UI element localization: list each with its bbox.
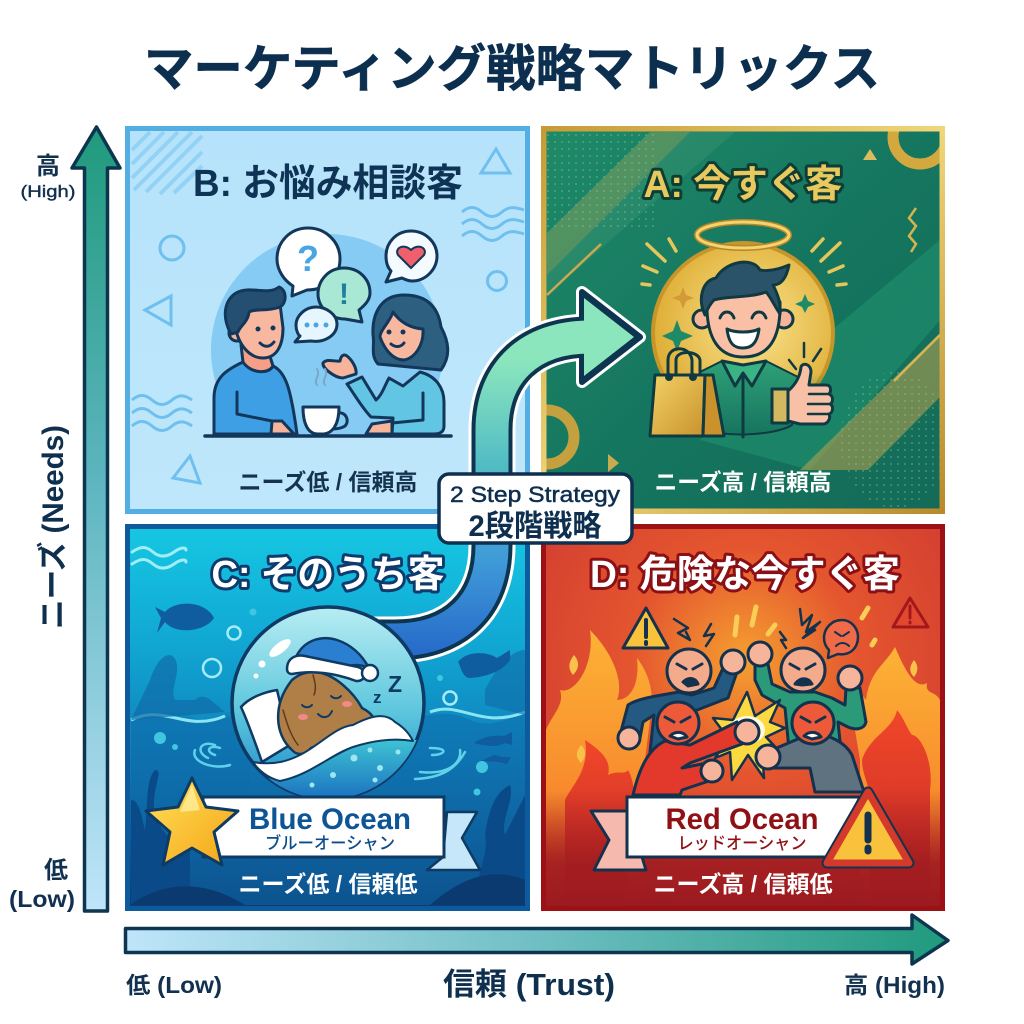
lower shading [546,796,940,906]
speech bubble: exclamation: ! [339,278,349,311]
soft backdrop circle [211,234,441,434]
strategy badge [439,474,632,543]
panel A border [544,128,942,512]
bubble contents [235,690,430,800]
blue ocean ribbon [146,778,480,870]
halo [697,222,789,248]
panel A: ready-now customers [520,110,950,514]
flames [546,630,940,856]
woman [323,295,448,434]
panel D background [541,524,945,911]
illustration: customers fighting [618,598,928,795]
panel D axis note: ニーズ高 / 信頼低 [654,871,832,897]
growth arrow from C to A [350,292,640,640]
axis label: high needs: (High) [20,182,76,201]
impact glow [729,716,765,744]
illustration: happy customer with halo [642,222,846,437]
thumbs-up hand [772,343,833,424]
nightcap [287,638,378,681]
snore letters: Z [388,671,402,697]
panel A axis note: ニーズ高 / 信頼高 [654,469,832,495]
radiating sparkle lines [642,239,846,285]
seaweed and coral [130,770,526,905]
red ocean ribbon [591,792,909,870]
strategy badge: 2段階戦略 [468,510,602,543]
customer head [693,262,793,357]
ribbon plate [203,797,444,857]
bubble highlights [254,636,293,678]
axis label: low needs [9,857,75,912]
anger speech bubble [824,620,858,658]
axis label: low trust: 低 (Low) [126,972,222,998]
panel B axis note: ニーズ低 / 信頼高 [238,469,418,495]
speech bubble: question: ? [297,238,319,279]
table line [205,434,451,438]
illustration: sleeping seed in a bubble [232,607,430,800]
panel B decoration [132,132,524,483]
snore letters [373,671,402,707]
green-shirt fighter [748,642,866,760]
glass bubble [232,607,424,799]
blanket [253,716,413,781]
blue-shirt fighter [618,649,745,752]
panel C border [128,526,528,908]
speech bubble: ellipsis [295,307,337,342]
golden disc [651,241,835,384]
panel B background [128,128,528,512]
axis title: trust: 信頼 (Trust) [443,967,615,1002]
warning triangle outline [893,598,928,627]
horizontal axis arrow [126,915,948,964]
axis title: needs: ニーズ (Needs) [36,425,70,629]
warning triangle [623,608,668,648]
axis label: high trust: 高 (High) [844,972,945,998]
blanket lower part [235,740,430,800]
horizontal axis: Trust [126,915,948,1002]
panel B title: B: お悩み相談客 [193,163,463,205]
coffee cup [303,369,347,434]
ribbon tail [591,811,646,870]
customer body [700,361,800,437]
blue ocean label: Blue Ocean [249,803,411,836]
panel A decoration [546,132,940,507]
title: マーケティング戦略マトリックス [144,41,880,97]
speech bubble: question [277,228,340,296]
panel B: worried consultation customers [128,128,528,512]
man [214,287,297,434]
lightning and sparks [674,609,820,648]
speech bubble: exclamation [318,268,370,322]
star icon [146,778,238,865]
sparkles on disc [662,287,815,352]
blue ocean katakana: ブルーオーシャン [265,833,395,853]
axis label: low needs: (Low) [9,886,75,912]
starburst impact [713,692,785,780]
speech bubble: heart [386,231,437,282]
axis label: high needs [20,153,76,201]
panel C axis note: ニーズ低 / 信頼低 [238,871,418,897]
panel A title: A: 今すぐ客 [644,164,842,206]
large warning triangle [827,792,909,863]
strategy badge: 2 Step Strategy [450,482,620,507]
panel D border [544,526,942,908]
axis label: high needs: 高 [36,153,60,180]
snore letters: z [373,688,382,707]
panel C background [125,524,530,911]
ribbon tail [427,812,480,870]
red-shirt fighter [633,702,759,795]
illustration: two people talking over coffee [205,228,451,466]
shopping bag [650,349,724,436]
panel C title: C: そのうち客 [212,554,444,596]
panel D title: D: 危険な今すぐ客 [590,554,900,596]
vertical axis arrow [72,127,120,911]
red ocean katakana: レッドオーシャン [678,834,806,853]
grey-shirt fighter [756,702,864,792]
ribbon plate [627,797,860,857]
panel D: dangerous ready-now customers [541,524,945,911]
fish silhouettes [155,604,512,764]
pillow [241,690,290,762]
axis label: low needs: 低 [44,857,68,884]
sleeping seed [278,672,375,754]
vertical axis: Needs [9,127,120,912]
red ocean label: Red Ocean [666,803,818,836]
panel A background [541,126,945,514]
bubbles [203,626,456,704]
